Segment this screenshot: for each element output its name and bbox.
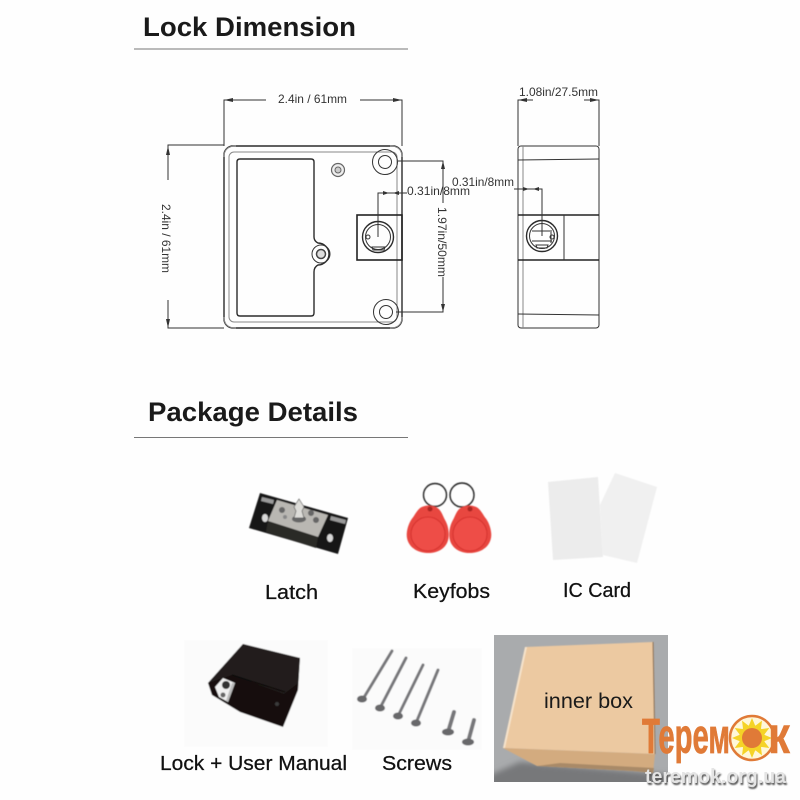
- diagram: lock side view: [452, 85, 599, 328]
- lock photo: [184, 640, 328, 747]
- heading: Package Details: Package Details: [148, 397, 358, 427]
- IC card label: IC Card: [563, 580, 631, 602]
- item: keyfobs: [406, 483, 492, 603]
- logo sun icon: [730, 716, 774, 760]
- dimension: height 2.4in: [159, 145, 224, 328]
- lock body outline: [224, 146, 402, 328]
- keyfobs label: Keyfobs: [413, 581, 490, 603]
- dimension: depth 1.08in: [518, 85, 599, 146]
- item: lock and user manual: [160, 640, 347, 775]
- dimension: width 2.4in: [224, 92, 402, 146]
- logo: Teremok watermark: [642, 707, 791, 790]
- diagram: lock front view: [159, 92, 470, 328]
- logo url shadow: teremok.org.ua: [646, 768, 788, 790]
- latch photo: [249, 493, 348, 554]
- item: inner box: [490, 635, 672, 790]
- side sensor: [526, 220, 558, 252]
- dimension: hole spacing 1.97in: 1.97in/50mm: [435, 207, 449, 277]
- sensor window: [357, 215, 402, 260]
- dimension: depth 1.08in: 1.08in/27.5mm: [519, 85, 598, 99]
- side body outline: [518, 146, 599, 328]
- battery cover: [237, 159, 329, 316]
- item: IC card: [548, 473, 657, 602]
- inner box label: inner box: [544, 690, 634, 713]
- screws label: Screws: [382, 753, 452, 775]
- cover screw: [312, 245, 330, 263]
- item: screws: [352, 648, 482, 775]
- IC card photo: [548, 473, 657, 563]
- dimension: sensor offset 0.31in: 0.31in/8mm: [407, 184, 470, 198]
- inner box photo: [490, 635, 672, 790]
- bottom mounting hole: [374, 300, 398, 324]
- dimension: sensor offset 0.31in: [378, 184, 470, 237]
- dimension: hole spacing 1.97in: [396, 161, 449, 312]
- small screw: [332, 164, 344, 176]
- screws photo: [352, 648, 482, 750]
- item: latch: [249, 493, 348, 604]
- logo url: teremok.org.ua: [645, 766, 787, 788]
- dimension: height 2.4in: 2.4in / 61mm: [159, 204, 173, 273]
- latch label: Latch: [265, 582, 318, 604]
- dimension: width 2.4in: 2.4in / 61mm: [278, 92, 347, 106]
- keyfob photo: [406, 483, 492, 554]
- lock label: Lock + User Manual: [160, 753, 347, 775]
- heading: Lock Dimension: Lock Dimension: [143, 12, 356, 42]
- dimension: side offset 0.31in: 0.31in/8mm: [452, 175, 514, 189]
- top mounting hole: [372, 150, 398, 174]
- dimension: side offset 0.31in: [452, 175, 542, 236]
- logo letter K: к: [768, 707, 791, 765]
- logo wordmark: Терем: [642, 710, 730, 764]
